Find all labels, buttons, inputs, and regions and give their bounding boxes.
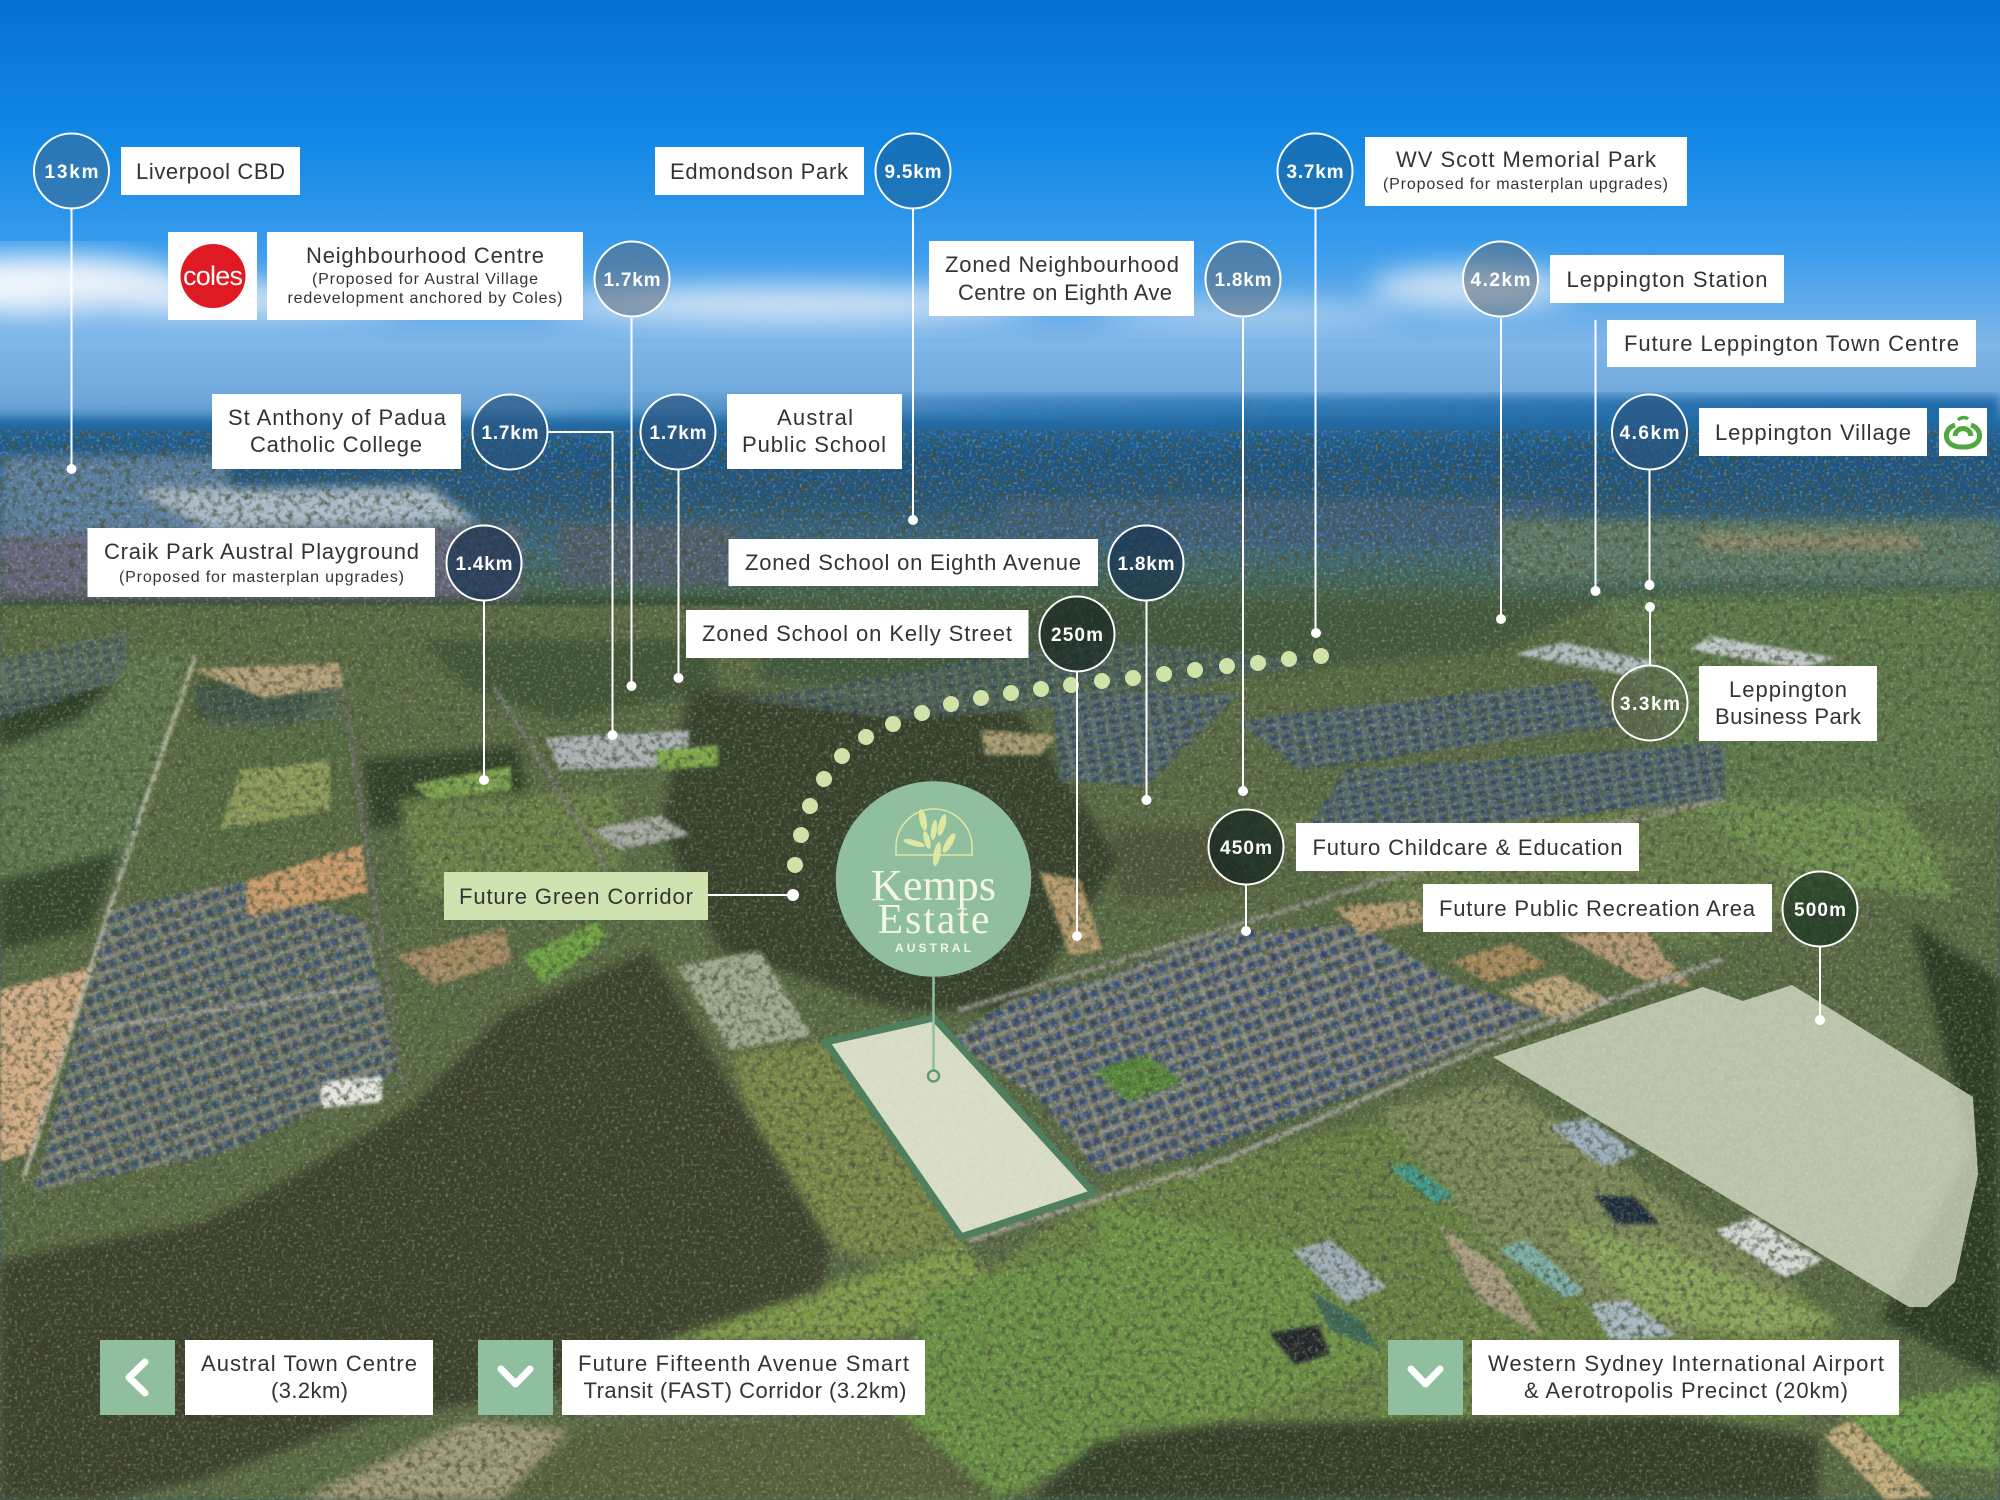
directional: Austral Town Centre: Austral Town Centre [201,1351,417,1376]
logo: Kemps Estate Austral: AUSTRAL [895,941,971,955]
callout: St Anthony of Padua: 1.7km [482,423,538,444]
roads [23,657,1720,1240]
icon: left chevron [129,1362,145,1393]
callout: Futuro Childcare: Futuro Childcare & Education [1312,835,1622,860]
callout: Zoned Neighbourhood Centre [929,241,1280,316]
icon: down chevron [1411,1369,1440,1384]
callout: Craik Park: (Proposed for masterplan upgrades) [119,569,404,586]
land base [0,605,2000,1500]
callout: Austral Public School: Austral [777,405,853,430]
leader lines and end dots [66,209,1825,1025]
directional: Future Fifteenth Avenue Smart Transit: Future Fifteenth Avenue Smart [578,1351,909,1376]
directional: Western Sydney International Airport: & Aerotropolis Precinct (20km) [1524,1378,1848,1403]
callout: Leppington Business Park: 3.3km [1620,694,1680,715]
directional: Austral Town Centre: (3.2km) [271,1378,348,1403]
callout: Leppington Village with Woolworths [1612,394,1987,470]
callout: WV Scott Memorial Park [1278,134,1687,208]
callout: Neighbourhood Centre with Coles: Neighbourhood Centre [306,243,544,268]
callout: Zoned School on Eighth Avenue: 1.8km [1118,554,1174,575]
future public recreation area overlay [1493,985,1978,1307]
logo: Kemps Estate Austral: Estate [878,897,990,943]
callout: St Anthony of Padua: Catholic College [250,432,422,457]
callout: Craik Park [88,526,522,600]
callout: Future Public Recreation Area: Future Public Recreation Area [1439,896,1756,921]
suburbs [0,630,1724,1191]
callout: Future Green Corridor [444,872,708,920]
callout: Neighbourhood Centre with Coles: (Proposed for Austral Village [312,271,538,288]
callout: Zoned School on Kelly Street: 250m [1051,625,1103,646]
directional: Western Sydney International Airport [1388,1340,1899,1415]
callout: Future Leppington Town Centre: Future Leppington Town Centre [1624,331,1959,356]
icon: Woolworths logo [1946,418,1980,447]
callout: Zoned Neighbourhood Centre: 1.8km [1214,270,1272,291]
callout: WV Scott Memorial Park: (Proposed for masterplan upgrades) [1383,176,1668,193]
callout: Zoned Neighbourhood Centre: Zoned Neighbourhood [945,252,1179,277]
callout: Neighbourhood Centre with Coles [168,232,670,320]
callout: Austral Public School [640,394,902,470]
callout: Future Green Corridor: Future Green Corridor [459,884,693,909]
callout: Edmondson Park: Edmondson Park [670,159,849,184]
callout: Futuro Childcare [1208,810,1639,884]
site boundary: Kemps Estate [826,1018,1094,1237]
callout: Liverpool CBD 13km: Liverpool CBD [136,159,285,184]
callout: Leppington Station: 4.2km [1470,270,1530,291]
callout: Neighbourhood Centre with Coles: redevelopment anchored by Coles) [288,290,562,307]
callout: Edmondson Park [655,134,950,208]
icon: Coles logo: coles [183,261,243,291]
callout: Future Public Recreation Area: 500m [1794,900,1846,921]
callout: Craik Park: 1.4km [456,554,512,575]
directional: Austral Town Centre [100,1340,433,1415]
callout: Futuro Childcare: 450m [1220,838,1272,859]
callout: St Anthony of Padua [212,394,548,470]
logo: Kemps Estate Austral [836,781,1031,1082]
callout: Austral Public School: 1.7km [650,423,706,444]
callout: Leppington Business Park [1612,666,1877,741]
directional: Future Fifteenth Avenue Smart Transit: Transit (FAST) Corridor (3.2km) [584,1378,906,1403]
callout: Zoned Neighbourhood Centre: Centre on Eighth Ave [958,280,1172,305]
callout: Zoned School on Eighth Avenue [728,526,1184,600]
callout: Zoned School on Kelly Street: Zoned School on Kelly Street [702,621,1012,646]
callout: Future Leppington Town Centre [1607,320,1976,367]
callout: WV Scott Memorial Park: WV Scott Memorial Park [1396,147,1657,172]
tan and earth fields [0,636,1932,1500]
callout: Leppington Village with Woolworths: 4.6km [1620,423,1680,444]
callout: WV Scott Memorial Park: 3.7km [1286,162,1344,183]
callout: Edmondson Park: 9.5km [884,162,942,183]
icon: down chevron [501,1369,530,1384]
icon: Coles logo [180,244,246,308]
green corridor dots [787,648,1329,873]
callout: Future Public Recreation Area [1423,872,1858,946]
callout: Leppington Business Park: Business Park [1715,704,1862,729]
logo: Kemps Estate Austral: Kemps [871,861,996,910]
callout: Zoned School on Eighth Avenue: Zoned School on Eighth Avenue [745,550,1081,575]
callout: Zoned School on Kelly Street [686,596,1114,672]
forest [0,950,1818,1500]
callout: Liverpool CBD 13km: 13km [44,162,98,183]
callout: Austral Public School: Public School [742,432,886,457]
callout: Leppington Business Park: Leppington [1729,677,1847,702]
callout: Liverpool CBD 13km [34,134,300,208]
callout: Leppington Station: Leppington Station [1566,267,1768,292]
callout: Leppington Village with Woolworths: Leppington Village [1715,420,1911,445]
callout: Leppington Station [1463,242,1784,316]
callout: Craik Park: Craik Park Austral Playground [104,539,419,564]
callout: Neighbourhood Centre with Coles: 1.7km [604,270,660,291]
directional: Western Sydney International Airport: Western Sydney International Airport [1488,1351,1884,1376]
callout: St Anthony of Padua: St Anthony of Padua [228,405,447,430]
directional: Future Fifteenth Avenue Smart Transit [478,1340,925,1415]
